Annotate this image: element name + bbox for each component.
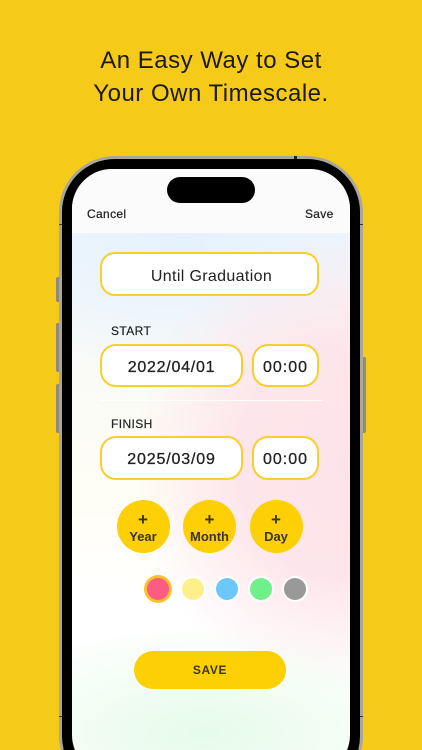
title <box>93 47 329 107</box>
day button <box>250 500 302 553</box>
finish date field: 2025/03/09 <box>127 451 216 468</box>
day button: Day <box>264 529 288 544</box>
divider <box>100 400 323 401</box>
cancel button: Cancel <box>87 207 126 221</box>
start label: START <box>111 324 151 338</box>
header bar <box>72 169 350 233</box>
finish time field: 00:00 <box>263 451 308 468</box>
phone screen <box>72 169 350 750</box>
title field <box>100 252 319 296</box>
title field: Until Graduation <box>151 268 272 285</box>
save link: Save <box>305 207 334 221</box>
start date field <box>100 344 243 387</box>
save button <box>134 651 286 689</box>
finish time field <box>252 436 319 480</box>
title: Your Own Timescale. <box>93 80 329 107</box>
phone bottom corners <box>59 736 363 750</box>
year button: Year <box>129 529 157 544</box>
phone frame <box>59 156 363 750</box>
icon: phone side buttons <box>56 277 366 433</box>
start time field <box>252 344 319 387</box>
day button: + <box>271 510 281 529</box>
month button <box>183 500 236 553</box>
phone body <box>59 156 363 750</box>
color swatch: gray <box>284 578 306 600</box>
color swatch: pink selected <box>147 578 169 600</box>
month button: + <box>205 510 214 529</box>
color swatch: blue <box>216 578 238 600</box>
frame antenna marks <box>59 156 363 717</box>
year button <box>116 500 170 553</box>
screen gradient background <box>72 233 350 750</box>
year button: + <box>138 510 148 529</box>
dynamic island <box>167 177 255 203</box>
color swatch: yellow <box>182 578 204 600</box>
finish date field <box>100 436 243 480</box>
finish label: FINISH <box>111 417 153 431</box>
start date field: 2022/04/01 <box>128 358 215 376</box>
month button: Month <box>190 529 229 544</box>
color swatch: green <box>250 578 272 600</box>
start time field: 00:00 <box>263 358 308 376</box>
title: An Easy Way to Set <box>100 47 322 74</box>
save button: SAVE <box>193 663 227 677</box>
